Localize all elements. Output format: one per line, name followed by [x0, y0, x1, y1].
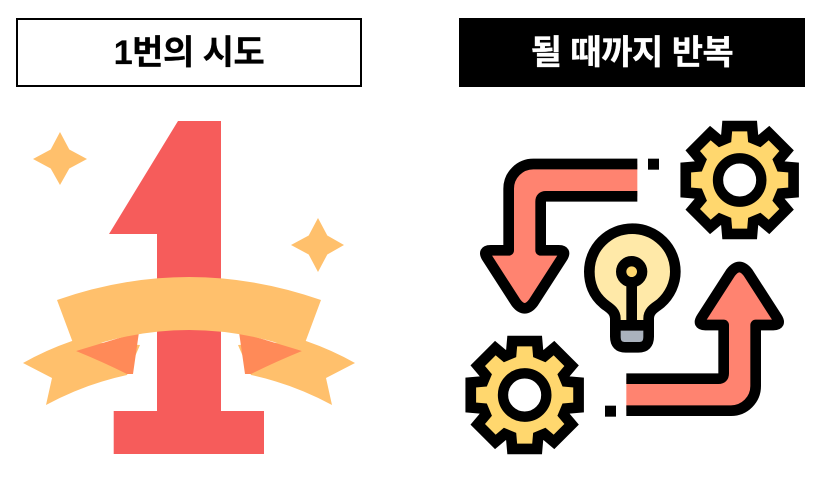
icon: star left [33, 132, 87, 185]
ribbon main band [57, 277, 321, 351]
heading: 1번의 시도: 1번의 시도 [114, 34, 264, 72]
icon: arrow pointing down [485, 164, 637, 308]
ribbon [23, 277, 355, 405]
icon: arrow pointing up [626, 267, 779, 411]
ribbon left tail [23, 341, 140, 405]
icon: number one [109, 121, 264, 454]
icon: star right [291, 218, 344, 272]
heading: 될 때까지 반복: 될 때까지 반복 [531, 34, 733, 72]
heading: 1번의 시도 [16, 18, 362, 87]
illustration: repeat cycle with gears and light bulb [465, 120, 799, 454]
square dot top [648, 159, 659, 170]
icon: gear bottom left [471, 341, 579, 449]
heading: 될 때까지 반복 [459, 18, 805, 87]
icon: light bulb [589, 229, 675, 347]
ribbon left fold [76, 332, 139, 374]
square dot bottom [605, 406, 616, 417]
illustration: number one with ribbon and stars [23, 121, 355, 454]
ribbon right fold [239, 332, 302, 374]
icon: gear top right [686, 126, 794, 234]
ribbon right tail [238, 341, 355, 405]
